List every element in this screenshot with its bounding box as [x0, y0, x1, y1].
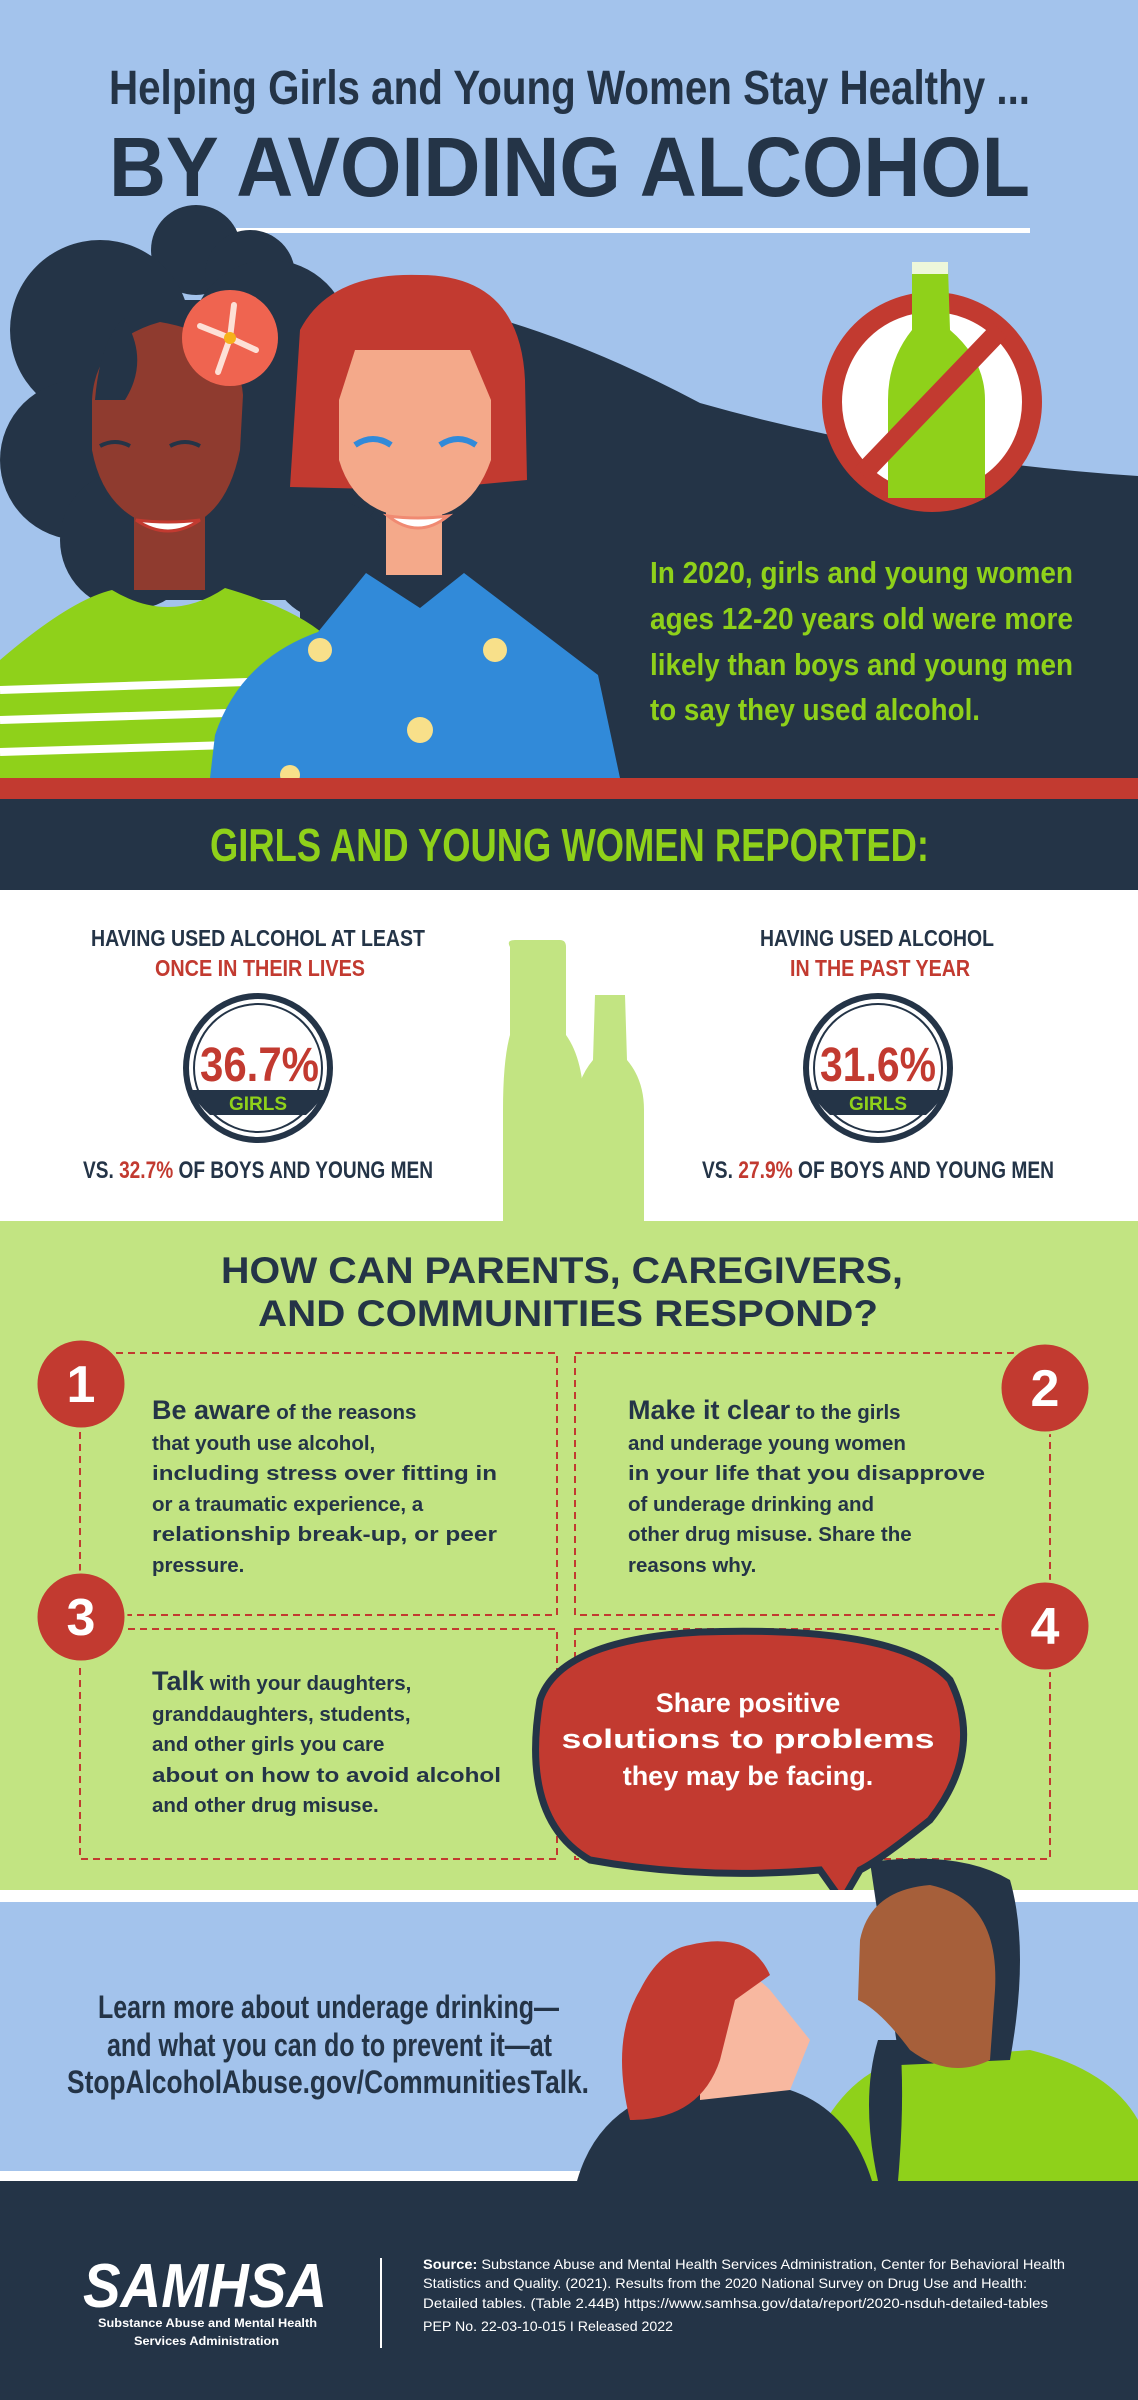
- logo: SAMHSA: [83, 2252, 327, 2348]
- tip 2: 2: [1031, 1360, 1059, 1418]
- title: [109, 62, 1030, 214]
- speech bubble: solutions to problems: [562, 1724, 934, 1754]
- tip 3: [36, 1572, 501, 1817]
- intro text: In 2020, girls and young women: [650, 555, 1073, 590]
- stat: lifetime: 36.7%: [200, 1039, 319, 1092]
- left eyes and smile: [100, 442, 200, 446]
- intro text: likely than boys and young men: [650, 647, 1073, 682]
- logo: SAMHSA: SAMHSA: [83, 2252, 327, 2321]
- source text: Statistics and Quality. (2021). Results from the 2020 National Survey on Drug Use and Health:: [423, 2275, 1027, 2291]
- heading: respond: AND COMMUNITIES RESPOND?: [258, 1293, 878, 1334]
- tip 2: of underage drinking and: [628, 1493, 874, 1516]
- tip 4: 4: [1031, 1598, 1060, 1656]
- tip 1: relationship break-up, or peer: [152, 1523, 497, 1546]
- left woman hair: [0, 205, 390, 620]
- learn more text: Learn more about underage drinking—: [98, 1989, 559, 2025]
- stat: past year: VS. 27.9% OF BOYS AND YOUNG MEN: [702, 1157, 1054, 1184]
- dashed boxes: [80, 1353, 1050, 1859]
- illustration: two women talking: [577, 1859, 1138, 2181]
- source text: Detailed tables. (Table 2.44B) https://www.samhsa.gov/data/report/2020-nsduh-detailed-tables: [423, 2295, 1048, 2311]
- logo: SAMHSA: Services Administration: [134, 2334, 279, 2348]
- source text: PEP No. 22-03-10-015 I Released 2022: [423, 2318, 673, 2334]
- heading: respond: [221, 1250, 903, 1334]
- speech bubble: Share positive: [656, 1688, 840, 1718]
- tip 1: or a traumatic experience, a: [152, 1493, 424, 1516]
- title: BY AVOIDING ALCOHOL: [109, 120, 1030, 214]
- tip 1: 1: [67, 1356, 95, 1414]
- stat: lifetime: VS. 32.7% OF BOYS AND YOUNG MEN: [83, 1157, 433, 1184]
- stat: past year: IN THE PAST YEAR: [790, 955, 970, 981]
- tip 1: pressure.: [152, 1554, 244, 1577]
- tip 2: other drug misuse. Share the: [628, 1523, 912, 1546]
- logo: SAMHSA: Substance Abuse and Mental Health: [98, 2316, 317, 2330]
- intro text: [650, 555, 1073, 727]
- tip 4: [1000, 1581, 1090, 1671]
- tip 2: and underage young women: [628, 1432, 906, 1455]
- right woman shirt: [210, 573, 620, 778]
- stat: past year: 31.6%: [820, 1039, 936, 1092]
- icon: bottles: [503, 940, 644, 1221]
- stat: lifetime: ONCE IN THEIR LIVES: [155, 955, 365, 981]
- tip 3: and other drug misuse.: [152, 1794, 379, 1817]
- right woman face: [339, 350, 491, 518]
- footer background: [0, 2181, 1138, 2400]
- tip 3: Talk with your daughters,: [152, 1666, 411, 1696]
- stat: lifetime: HAVING USED ALCOHOL AT LEAST: [91, 925, 425, 951]
- learn more text: [67, 1989, 589, 2100]
- stat: past year: [702, 925, 1054, 1184]
- dark hair wave: [300, 322, 1138, 778]
- tip 1: including stress over fitting in: [152, 1462, 497, 1485]
- tip 3: 3: [67, 1589, 95, 1647]
- tip 2: [628, 1343, 1090, 1577]
- stat: past year: GIRLS: [849, 1094, 907, 1115]
- tip 2: reasons why.: [628, 1554, 756, 1577]
- intro text: to say they used alcohol.: [650, 692, 980, 727]
- illustration: two smiling women: [0, 205, 620, 785]
- heading: respond: HOW CAN PARENTS, CAREGIVERS,: [221, 1250, 903, 1291]
- heading band: reported: GIRLS AND YOUNG WOMEN REPORTED:: [210, 819, 929, 871]
- tip 1: that youth use alcohol,: [152, 1432, 375, 1455]
- left woman shirt: [0, 588, 330, 778]
- speech bubble: [536, 1631, 964, 1901]
- learn more text: StopAlcoholAbuse.gov/CommunitiesTalk.: [67, 2064, 589, 2100]
- source text: [423, 2256, 1065, 2334]
- source text: Source: Substance Abuse and Mental Health Services Administration, Center for Behavioral Health: [423, 2256, 1065, 2272]
- speech bubble: they may be facing.: [623, 1761, 873, 1791]
- right woman hair: [290, 275, 527, 490]
- tip 3: granddaughters, students,: [152, 1703, 411, 1726]
- stat: lifetime: [83, 925, 433, 1184]
- tip 2: Make it clear to the girls: [628, 1395, 901, 1425]
- icon: no alcohol sign: [832, 262, 1032, 502]
- intro text: ages 12-20 years old were more: [650, 601, 1073, 636]
- left woman face: [92, 322, 243, 530]
- tip 2: in your life that you disapprove: [628, 1462, 985, 1485]
- panel: respond: [0, 1221, 1138, 1890]
- tip 1: [36, 1339, 497, 1577]
- learn more text: and what you can do to prevent it—at: [107, 2027, 552, 2063]
- tip 1: Be aware of the reasons: [152, 1395, 416, 1425]
- tip 3: about on how to avoid alcohol: [152, 1764, 501, 1787]
- heading band: reported: [0, 799, 1138, 890]
- header background: [0, 0, 1138, 800]
- stat: lifetime: GIRLS: [229, 1094, 287, 1115]
- tip 3: and other girls you care: [152, 1733, 384, 1756]
- flower: [182, 290, 278, 386]
- stat: past year: HAVING USED ALCOHOL: [760, 925, 994, 951]
